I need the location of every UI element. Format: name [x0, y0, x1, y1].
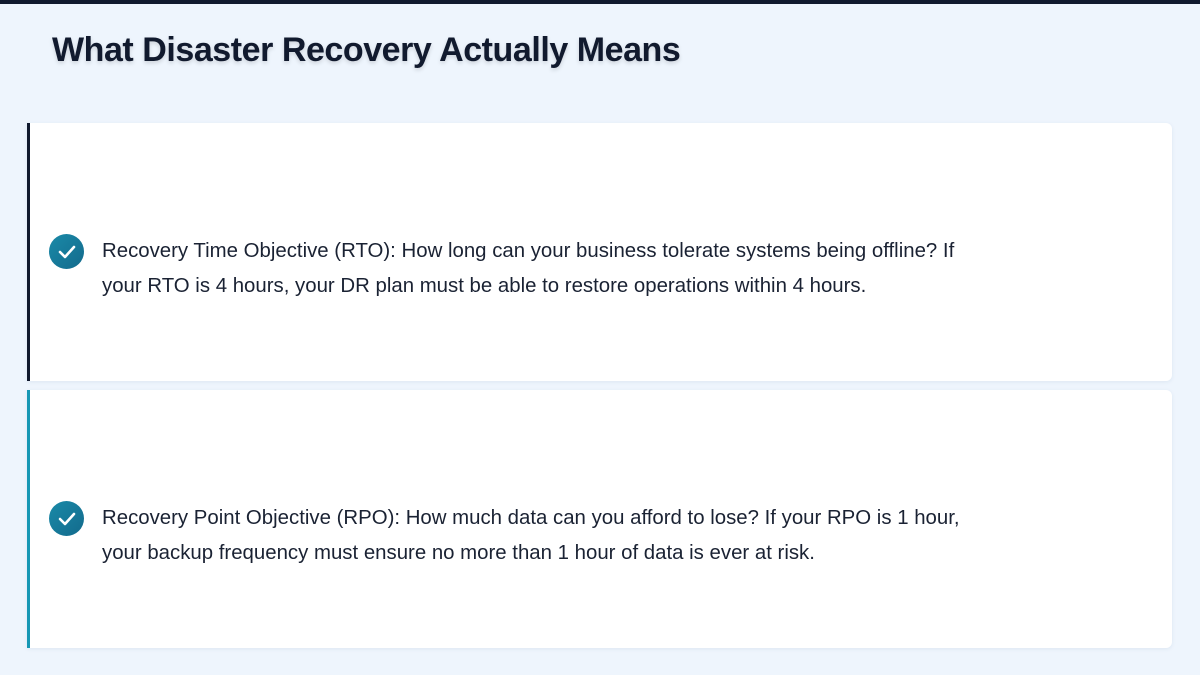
title: What Disaster Recovery Actually Means [52, 31, 680, 69]
text: RTO: Recovery Time Objective (RTO): How long can your business tolerate systems being offline? If your RTO is 4 hours, your DR plan must be able to restore operations within 4 hours. [102, 240, 954, 297]
panel: RTO [27, 123, 1172, 381]
icon: check [49, 234, 84, 269]
text: RPO: Recovery Point Objective (RPO): How much data can you afford to lose? If your RPO is 1 hour, your backup frequency must ensure no more than 1 hour of data is ever at risk. [102, 507, 960, 564]
icon: check [49, 501, 84, 536]
panel: RPO [27, 390, 1172, 648]
